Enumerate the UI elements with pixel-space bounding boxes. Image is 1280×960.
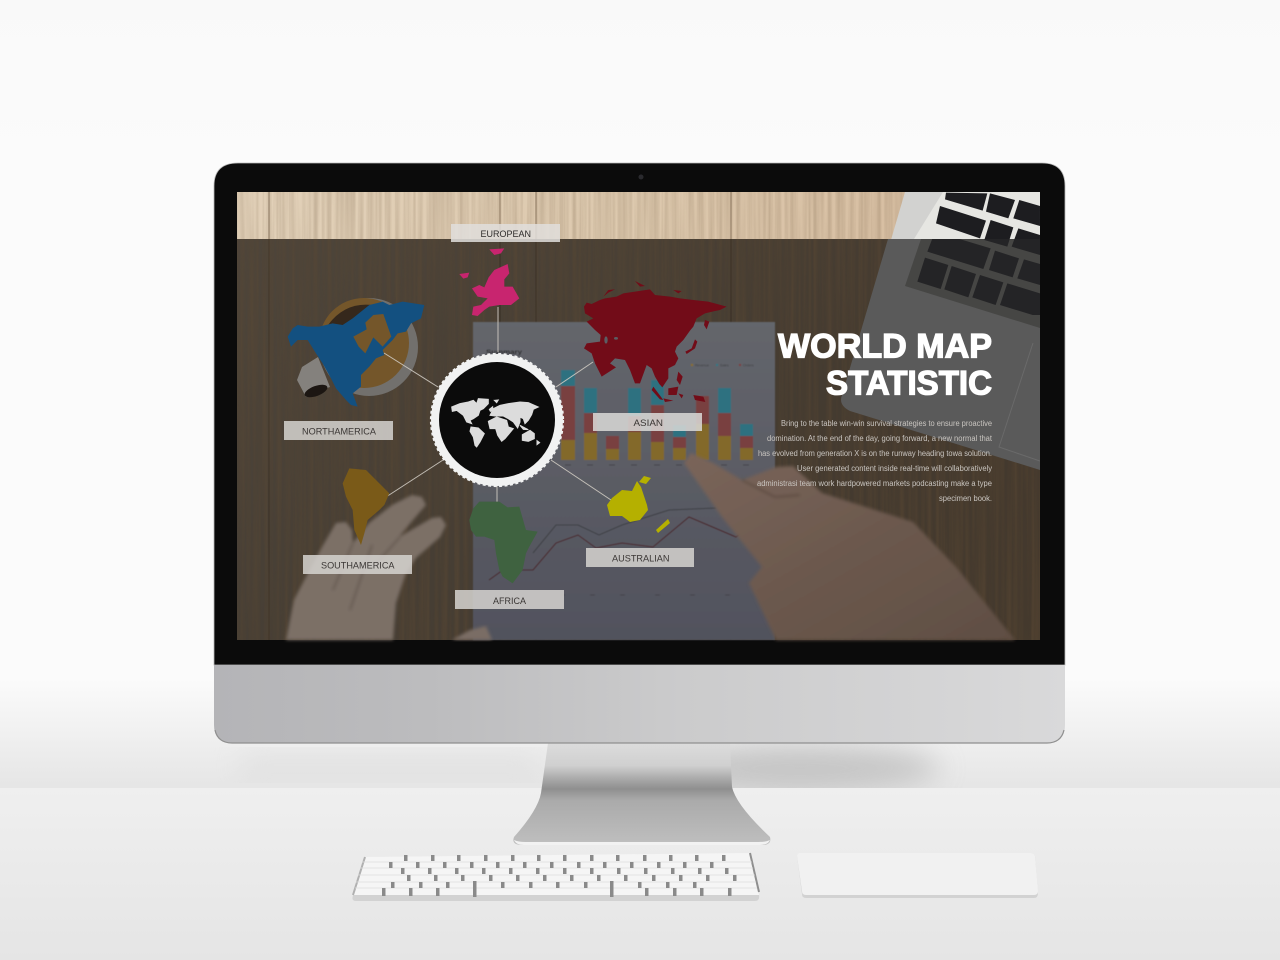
chart legend <box>691 364 754 368</box>
label: Asian: ASIAN <box>634 418 663 429</box>
label: Australian <box>586 548 694 567</box>
lines connecting centre to regions <box>384 307 611 505</box>
coffee cup <box>297 298 418 400</box>
label: European <box>451 224 560 242</box>
label: North America: NORTHAMERICA <box>302 426 377 438</box>
label: Africa <box>455 590 564 609</box>
laptop, dimmed part under the panel <box>841 239 1040 470</box>
label: Africa: AFRICA <box>493 596 527 607</box>
monitor body <box>214 163 1065 743</box>
central globe badge <box>431 354 563 486</box>
laptop, bright part above the panel <box>891 192 1040 239</box>
body text block <box>757 419 993 503</box>
printed report with bar and line charts <box>473 322 775 640</box>
wireless keyboard <box>352 853 759 901</box>
stacked bar chart <box>560 370 753 595</box>
thumb of right hand at bottom edge <box>452 626 492 640</box>
body text block: specimen book. <box>939 494 992 503</box>
body text block: Bring to the table win-win survival strategies to ensure proactive <box>781 419 993 428</box>
trackpad <box>797 853 1038 898</box>
dark overlay panel <box>237 239 1040 640</box>
chart legend: Sales <box>720 364 729 368</box>
title: STATISTIC <box>826 364 992 402</box>
map: Africa <box>469 502 538 583</box>
map: Europe <box>459 248 519 316</box>
label: South America: SOUTHAMERICA <box>321 560 395 572</box>
screen photo: wooden desk with laptop <box>237 192 1040 640</box>
map: Australia <box>607 476 670 533</box>
chart legend: Revenue <box>695 364 709 368</box>
label: Australian: AUSTRALIAN <box>612 554 670 564</box>
right hand pointing <box>684 453 1015 640</box>
label: South America <box>303 555 412 574</box>
title: WORLD MAP <box>778 328 992 366</box>
map: Asia <box>584 281 727 402</box>
body text block: domination. At the end of the day, going forward, a new normal that <box>767 434 993 443</box>
label: North America <box>284 421 393 440</box>
body text block: administrasi team work hardpowered markets podcasting make a type <box>757 479 993 488</box>
label: Asian <box>593 413 702 431</box>
title <box>778 328 992 402</box>
icon: world map <box>452 399 540 447</box>
label: European: EUROPEAN <box>480 229 531 240</box>
map: South America <box>343 468 389 545</box>
chart legend: Orders <box>743 364 754 368</box>
body text block: User generated content inside real-time will collaboratively <box>797 464 992 473</box>
map: North America <box>288 302 424 407</box>
monitor stand <box>513 743 770 845</box>
body text block: has evolved from generation X is on the runway heading towa solution. <box>758 449 992 458</box>
left hand <box>286 495 446 640</box>
printed report with bar and line charts: Summary <box>486 349 522 356</box>
line chart <box>489 508 749 580</box>
